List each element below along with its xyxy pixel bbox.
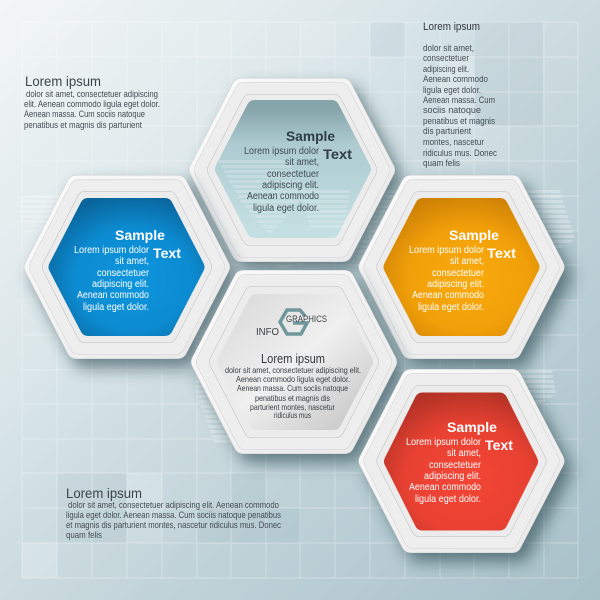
body text: Aenean commodo [412,290,484,301]
heading: Sample [449,227,499,243]
glass fill [223,108,363,230]
body text: Aenean massa. Cum sociis natoque [237,383,348,393]
heading: Text [487,245,516,261]
text block: bottom left [66,485,281,540]
hexagon: blue left [34,185,227,358]
body text: consectetuer [432,268,485,279]
body text: penatibus et magnis dis [255,393,330,403]
text block: top right: Aenean commodo [423,74,488,84]
text block: top right: montes, nascetur [423,137,484,147]
heading: Sample [286,128,335,144]
hexagon: orange right [368,185,562,358]
body text [244,146,320,214]
silver fill [225,302,365,422]
text block: top right: dolor sit amet, [423,43,474,53]
text block: top left: Aenean massa. Cum sociis natoque [24,109,145,119]
text block: bottom left: et magnis dis parturient montes, nascetur ridiculus mus. Donec [66,520,281,530]
text block: bottom left: Lorem ipsum [66,485,142,501]
heading [447,419,513,453]
body text: consectetuer [267,169,320,180]
body text: parturient montes, nascetur [250,402,335,412]
body text: Aenean commodo [77,290,149,301]
text block: bottom left: dolor sit amet, consectetuer adipiscing elit. Aenean commodo [68,500,279,510]
text block: top right: consectetuer [423,53,469,63]
body text [74,245,150,313]
logo: INFO [256,326,279,338]
text block: top right: penatibus et magnis [423,116,495,126]
body text: Lorem ipsum dolor [244,146,320,157]
logo: GRAPHICS [286,314,327,325]
heading [449,227,516,261]
body text: Lorem ipsum dolor [74,245,150,256]
orange fill [392,206,532,328]
text block: top right: ligula eget dolor. [423,85,481,95]
body text [409,245,485,313]
heading [286,128,352,162]
body text: ridiculus mus [274,410,311,420]
red fill [392,400,530,522]
text block: top right: adipiscing elit. [423,64,469,74]
body text: ligula eget dolor. [418,302,484,313]
body text: Aenean commodo [247,191,319,202]
text block: top right: quam felis [423,158,460,168]
text block: top left: Lorem ipsum [25,73,101,89]
body text: Lorem ipsum dolor [409,245,485,256]
body text: sit amet, [115,256,149,267]
heading: Sample [447,419,497,435]
text block: top left: dolor sit amet, consectetuer adipiscing [26,89,158,99]
body text: Lorem ipsum dolor [406,437,482,448]
body text: ligula eget dolor. [83,302,149,313]
heading: Text [153,245,181,261]
text block: bottom left: ligula eget dolor. Aenean massa. Cum sociis natoque penatibus [66,510,281,520]
hexagon: red [368,379,562,552]
world map [20,190,575,445]
logo [256,310,327,338]
body text: dolor sit amet, consectetuer adipiscing elit. [225,365,361,375]
hexagon: top glass [199,88,392,261]
body text: sit amet, [285,157,319,168]
body text: ligula eget dolor. [253,203,319,214]
body text: Aenean commodo [409,482,481,493]
body text: consectetuer [429,460,482,471]
text block: top right: sociis natoque [423,105,481,115]
body text: sit amet, [447,448,481,459]
body text: ligula eget dolor. [415,494,481,505]
body text [406,437,482,505]
text block: bottom left: quam felis [66,530,102,540]
body text: Aenean commodo ligula eget dolor. [236,374,350,384]
body text: adipiscing elit. [424,471,481,482]
body text: adipiscing elit. [427,279,484,290]
heading: Text [323,146,352,162]
blue fill [56,206,196,328]
body text [225,365,361,420]
heading: Sample [115,227,165,243]
heading: Text [485,437,513,453]
text block: top right: Lorem ipsum [423,21,480,33]
text block: top right: Aenean massa. Cum [423,95,495,105]
map stripes behind glass [218,160,350,235]
text block: top right: dis parturient [423,126,471,136]
heading [115,227,181,261]
heading: Lorem ipsum [261,351,325,366]
text block: top right: ridiculus mus. Donec [423,148,497,158]
body text: sit amet, [450,256,484,267]
text block: top right [423,21,497,168]
body text: adipiscing elit. [262,180,319,191]
text block: top left: elit. Aenean commodo ligula eget dolor. [24,99,160,109]
text block: top left [24,73,160,130]
body text: consectetuer [97,268,150,279]
hexagon: center logo [201,280,394,453]
text block: top left: penatibus et magnis dis parturient [24,120,142,130]
body text: adipiscing elit. [92,279,149,290]
